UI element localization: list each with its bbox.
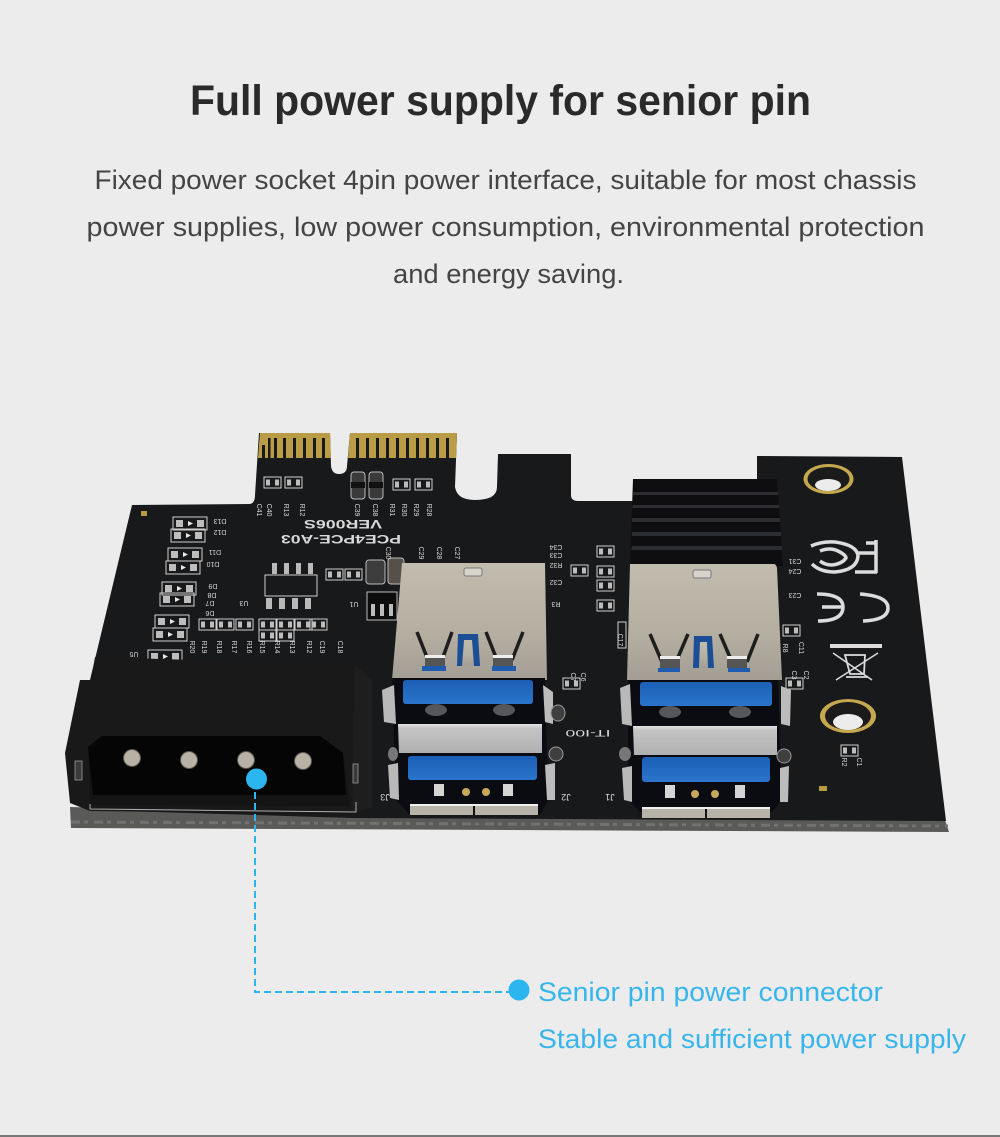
silkscreen labels: C32 [549,578,562,585]
spring tabs [650,634,758,662]
silkscreen component pads [141,472,858,791]
silkscreen labels: R28 [425,504,432,517]
callout text [538,977,967,1054]
silkscreen labels: R13 [288,641,295,654]
silkscreen labels: C17 [616,634,623,647]
callout end dot [508,980,530,1000]
silkscreen labels: C38 [371,504,378,517]
silkscreen labels: C40 [265,504,272,517]
board edge [70,807,949,832]
silkscreen labels: R32 [549,561,562,568]
USB 3.0 port stack, left [382,563,565,815]
silkscreen labels: U1 [349,600,358,607]
heatsink [630,479,783,566]
title: Full power supply for senior pin [190,77,811,125]
spring tabs [417,632,523,660]
silkscreen labels: R31 [388,504,395,517]
silkscreen labels: R20 [188,641,195,654]
silkscreen labels: J3 [380,792,390,802]
silkscreen labels: C1 [855,758,862,767]
silkscreen labels: C41 [255,504,262,517]
silkscreen labels: C27 [453,547,460,560]
silkscreen labels: C30 [384,547,391,560]
silkscreen labels: D12 [213,528,226,535]
silkscreen labels: R17 [230,641,237,654]
callout text: Stable and sufficient power supply [538,1024,967,1054]
description text: and energy saving. [393,259,624,289]
icon: FCC mark [811,540,877,573]
USB 3.0 port stack, right [619,564,791,818]
silkscreen labels: C39 [353,504,360,517]
mounting holes [804,464,876,733]
silkscreen labels: R2 [840,758,847,767]
silkscreen labels: C29 [417,547,424,560]
silkscreen labels: C31 [788,557,801,564]
silkscreen labels: R19 [200,641,207,654]
icon: CE mark [817,594,888,621]
description text: Fixed power socket 4pin power interface, suitable for most chassis [94,165,916,195]
callout text: Senior pin power connector [538,977,883,1007]
gold fingers [258,433,457,459]
silkscreen labels: C24 [788,567,801,574]
silkscreen labels: C19 [318,641,325,654]
silkscreen labels: D8 [207,591,216,598]
silkscreen labels: C7 [569,673,576,682]
silkscreen labels: R29 [412,504,419,517]
silkscreen labels: D9 [208,582,217,589]
silkscreen labels: C6 [579,673,586,682]
silkscreen labels: C34 [549,543,562,550]
silkscreen labels: D10 [206,560,219,567]
silkscreen labels: C2 [802,671,809,680]
pins [124,750,312,770]
silkscreen labels: C23 [788,591,801,598]
silkscreen labels: IT-I00 [566,728,610,738]
silkscreen labels: R16 [245,641,252,654]
silkscreen labels: J2 [561,792,571,802]
silkscreen labels: D7 [205,599,214,606]
description text: power supplies, low power consumption, environmental protection [86,212,925,242]
silkscreen labels: C11 [797,642,804,654]
silkscreen labels: D13 [213,517,226,524]
silkscreen labels: C3 [790,671,797,680]
callout leader line [255,792,512,992]
silkscreen labels: J1 [605,792,615,802]
silkscreen labels: VER006S [304,517,382,529]
silkscreen labels: U5 [129,650,138,657]
silkscreen labels: PCE4PCE-A03 [281,532,401,544]
silkscreen labels: D6 [205,609,214,616]
silkscreen labels: R8 [781,644,788,653]
silkscreen labels: C28 [435,547,442,560]
silkscreen labels: R3 [551,600,560,607]
silkscreen labels: U3 [239,599,248,606]
silkscreen labels: D11 [209,548,221,555]
chip U3 [265,563,317,609]
callout dot on connector [246,768,267,790]
silkscreen labels: R15 [258,641,265,654]
silkscreen labels: C18 [336,641,343,654]
silkscreen labels: R18 [215,641,222,654]
silkscreen labels: R12 [298,504,305,517]
silkscreen labels [129,504,862,802]
Molex 4-pin power connector [65,657,372,814]
silkscreen labels: R14 [273,641,280,654]
product photo: PCIe riser card [65,433,949,832]
silkscreen labels: R13 [282,504,289,517]
description text [86,165,925,289]
circuit board [90,433,946,821]
silkscreen labels: R30 [400,504,407,517]
silkscreen labels: C33 [549,551,562,558]
icon: WEEE crossed bin [830,646,882,680]
silkscreen labels: R12 [305,641,312,654]
